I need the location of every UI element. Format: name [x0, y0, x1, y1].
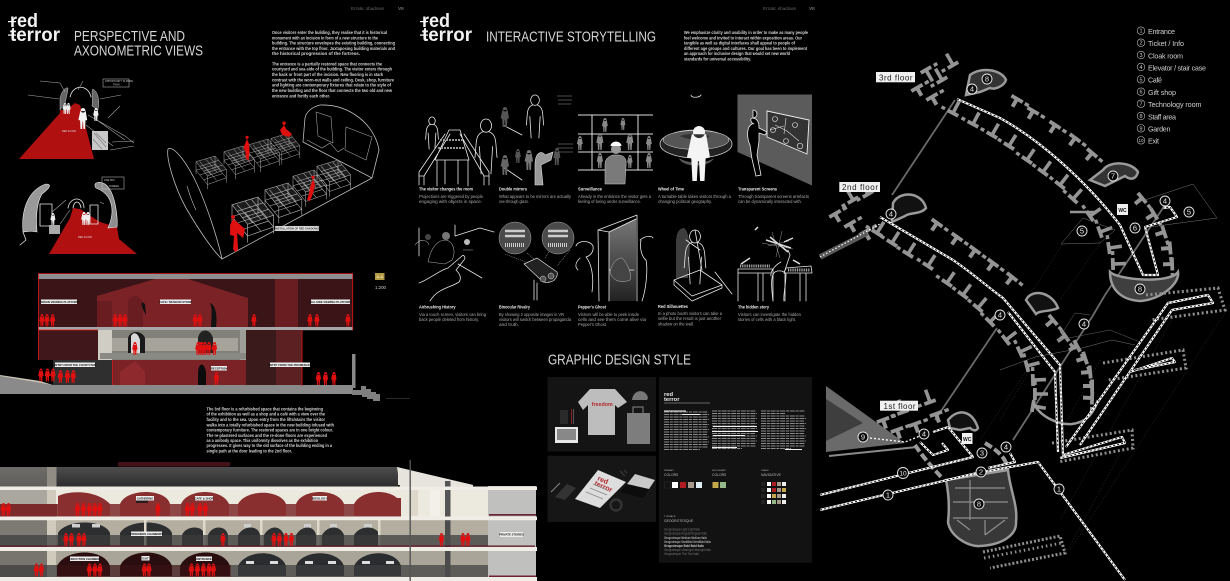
- sketch: perspective of entrance with red floor: RED FLOOR: [62, 130, 76, 133]
- panel: brand guideline sheet: [659, 377, 812, 563]
- legend: numbered room list: 5: [1139, 77, 1143, 83]
- WC signs: [962, 204, 1128, 444]
- map markers: numbered circles: 4: [1004, 443, 1008, 452]
- map markers: numbered circles: 10: [899, 470, 907, 478]
- caption: the visitor changes the room: Projections are triggered by people: [419, 194, 484, 199]
- text block: inclusive design statement: an approach for inclusive design that would set new world: [684, 51, 790, 56]
- text block: entrance description: and lighting are contemporary fixtures that relate to the style of: [272, 83, 391, 88]
- text block: 3rd floor description: of the exhibition as well as a shop and a café with a view over the: [206, 412, 325, 416]
- sketch: perspective of hall with red floor: [20, 177, 137, 254]
- labels: long section room labels: ENTRANCE: [196, 557, 212, 561]
- dotted garden path and entry road: [820, 224, 920, 442]
- floor slabs: white bands: [0, 486, 537, 581]
- highlighted text streaks: [664, 410, 802, 450]
- caption: the visitor changes the room: [419, 186, 484, 204]
- caption: wheel of time: [658, 186, 732, 204]
- labels: section room labels: ENTRY FROM THE PROMENADE: [268, 363, 312, 367]
- heading: perspective and axonometric views: AXONOMETRIC VIEWS: [74, 44, 203, 60]
- map markers: numbered circles: 9: [861, 433, 865, 442]
- figures: visitors in section: [38, 314, 350, 385]
- caption: red silhouettes: Red Silhouettes: [658, 304, 688, 309]
- palette: navigative: USAGE: [761, 469, 769, 472]
- sketch: perspective of hall with red floor: RED FLOOR: [78, 236, 92, 239]
- palette: primary colors: COLORS: [664, 473, 679, 477]
- text block: 3rd floor description: progresses. It gives way to the old surface of the building ending in a: [206, 443, 332, 448]
- legend: numbered room list: Garden: [1148, 125, 1170, 134]
- text block: inclusive design statement: feel welcome and invited to interact within exposition areas. Our: [684, 35, 802, 40]
- WC signs: WC: [963, 437, 972, 443]
- scale badge: A-A and 1:200: A-A: [376, 275, 383, 279]
- panel: perspective and axonometric views: [0, 6, 410, 454]
- plan: garden triangle: [826, 386, 917, 457]
- text block: 3rd floor description: The re-plastered surfaces and the re-done floors are experienced: [206, 433, 327, 438]
- vignette: transparent screens: [738, 94, 812, 204]
- palette: secondary colors: SECONDARY: [712, 469, 726, 472]
- typography specimen: Geogrotesque UltraLight UltraLight Italic: [664, 548, 711, 552]
- caption: binocular rivalry: By showing 2 opposite images in VR: [499, 312, 564, 317]
- scale badge: A-A and 1:200: 1:200: [375, 285, 387, 290]
- legend: numbered room list: Exit: [1148, 137, 1159, 146]
- map markers: numbered circles: 7: [1111, 172, 1115, 181]
- plan: third floor wing: [910, 51, 1217, 301]
- caption: double mirrors: What appears to be mirrors are actually: [499, 194, 572, 199]
- caption: Pepper's ghost: Pepper's Ghost: [578, 304, 606, 310]
- caption: transparent screens: [738, 186, 810, 204]
- caption: the hidden story: Visitors can investigate the hidden: [738, 312, 802, 317]
- elevator shafts and thin projection lines: [892, 100, 1230, 555]
- labels: long section room labels: PRISONERS CHAMBERS: [130, 532, 163, 536]
- map markers: numbered circles: 8: [985, 75, 989, 84]
- text block: inclusive design statement: [684, 30, 808, 61]
- labels: long section room labels: CAFE & SHOP: [194, 496, 214, 500]
- typography specimen: GEOGROTESQUE: [664, 519, 694, 523]
- header: page running title: [763, 6, 815, 12]
- text block: entrance description: the back or front part of the incision. New flooring is in stark: [272, 72, 383, 77]
- typography specimen: Geogrotesque Thin Thin Italic: [664, 552, 699, 556]
- panel: axonometric floor plan wayfinding map: [820, 27, 1230, 580]
- caption: red silhouettes: [658, 304, 723, 326]
- legend: numbered room list: Staff area: [1148, 112, 1176, 121]
- caption: Pepper's ghost: [578, 304, 647, 327]
- logo: red terror: [8, 11, 61, 46]
- legend: numbered room list: [1137, 27, 1206, 146]
- legend: numbered room list: 7: [1139, 102, 1143, 108]
- vignette: the hidden story: [738, 227, 812, 322]
- map markers: numbered circles: [858, 74, 1194, 509]
- caption: Pepper's ghost: cells and see them come alive via: [578, 317, 647, 322]
- map markers: numbered circles: 6: [1133, 224, 1137, 233]
- map markers: numbered circles: 4: [998, 311, 1002, 320]
- text block: entrance description: The entrance is a partially restored space that connects the: [272, 61, 382, 66]
- sketch: perspective of hall with red floor: SCREEN: [109, 185, 119, 188]
- caption: the hidden story: The hidden story: [738, 304, 769, 310]
- sketch: perspective of entrance with red floor: [19, 79, 134, 159]
- legend: numbered room list: Technology room: [1148, 100, 1202, 109]
- scale badge: A-A and 1:200: [375, 273, 387, 290]
- text block: 3rd floor description: walks into a totally refurbished space in the new building infused with: [206, 422, 334, 427]
- section drawing: long elevation with arches: [0, 460, 537, 581]
- legend: numbered room list: Entrance: [1148, 27, 1175, 36]
- legend: numbered room list: 9: [1139, 126, 1143, 132]
- caption: the hidden story: stories of cells with a black light.: [738, 317, 796, 322]
- text block: 3rd floor description: facility and to the sea. Upon entry from the lifts/stairs the visitor: [206, 417, 325, 422]
- legend: numbered room list: Gift shop: [1148, 88, 1176, 97]
- legend: numbered room list: Elevator / stair case: [1148, 64, 1206, 72]
- vignette: Pepper's ghost: [576, 215, 653, 327]
- heading: graphic design style: GRAPHIC DESIGN STYLE: [548, 352, 691, 368]
- plan: first floor wing: [876, 288, 1225, 568]
- labels: section room labels: SEA-SIDE VIEWING PLATFORM: [309, 300, 352, 304]
- logo: red terror: red: [422, 11, 450, 32]
- text columns: body copy: [664, 411, 806, 450]
- logo: red terror: terror: [422, 25, 473, 46]
- logo: red terror small: [664, 392, 710, 404]
- text block: 3rd floor description: [206, 406, 334, 454]
- map markers: numbered circles: 5: [1187, 208, 1191, 217]
- section drawing A-A: building section with red spaces: [0, 274, 410, 401]
- caption: binocular rivalry: Binocular Rivalry: [499, 304, 530, 310]
- caption: binocular rivalry: [499, 304, 572, 327]
- caption: the visitor changes the room: engaging with objects in space.: [419, 199, 482, 204]
- mockup: stationery: [548, 456, 656, 522]
- labels: long section room labels: GATHERING: [137, 496, 153, 500]
- header: page running title: VII: [398, 6, 404, 11]
- caption: transparent screens: can be dynamically interacted with.: [738, 199, 802, 204]
- legend: numbered room list: 3: [1139, 53, 1143, 59]
- vignette: double mirrors: [499, 95, 573, 204]
- text block: entrance description: the historical progression of the fortress.: [272, 51, 360, 56]
- caption: red silhouettes: shadow on the wall.: [658, 321, 694, 326]
- palette: navigative: [761, 469, 786, 504]
- caption: Pepper's ghost: Visitors will be able to peek inside: [578, 312, 640, 317]
- labels: section room labels: PRISON VIEWING PLATFORM: [39, 300, 80, 304]
- labels: long section room labels: PRIVATE STORIES: [499, 532, 524, 536]
- caption: transparent screens: Transparent Screens: [738, 186, 777, 192]
- floor: first floor with dark red arches: [0, 551, 536, 577]
- legend: numbered room list: Cloak room: [1148, 51, 1183, 60]
- map markers: numbered circles: 5: [1080, 227, 1084, 236]
- heading: interactive storytelling: INTERACTIVE STORYTELLING: [486, 30, 656, 46]
- typography specimen: Geogrotesque Light Light Italic: [664, 528, 700, 532]
- labels: section room labels: ENTRY FROM THE COURTYARD: [53, 363, 97, 367]
- legend: numbered room list: 2: [1139, 41, 1143, 47]
- legend: numbered room list: 10: [1138, 138, 1144, 143]
- text block: inclusive design statement: tangible as well as digital interfaces shall appeal to people of: [684, 41, 795, 46]
- caption: red silhouettes: selfie but the result is just another: [658, 316, 722, 321]
- text block: 3rd floor description: The 3rd floor is a refurbished space that contains the beginning: [206, 406, 323, 411]
- palette: navigative: NAVIGATIVE: [761, 473, 782, 477]
- caption: Pepper's ghost: Pepper's Ghost.: [578, 322, 607, 327]
- text block: entrance description: contrast with the worn-out walls and ceiling. Desk, shop, furniture: [272, 78, 394, 82]
- labels: section room labels: CAFE / MUSEUM STORE: [159, 300, 192, 304]
- typography specimen: Geogrotesque Regular Regular Italic: [664, 532, 707, 536]
- map markers: numbered circles: 4: [1163, 197, 1167, 206]
- caption: double mirrors: see-through glass.: [499, 199, 529, 204]
- caption: wheel of time: Wheel of Time: [658, 186, 684, 192]
- labels: long section room labels: [69, 496, 524, 561]
- text block: entrance description: Once visitors enter the building, they realise that it is historical: [272, 30, 387, 35]
- logo: red terror: red: [10, 11, 38, 32]
- text block: entrance description: monument with an incision in form of a new structure to the: [272, 35, 378, 40]
- map markers: numbered circles: 4: [889, 210, 893, 219]
- caption: surveillance: Already in the entrance the visitor gets a: [578, 194, 652, 199]
- palette: primary colors: [664, 469, 702, 488]
- vignette: wheel of time: [658, 95, 732, 204]
- text block: entrance description: courtyard and sea-side of the building. The visitor enters through: [272, 67, 392, 72]
- floor labels: 1st floor: [884, 402, 916, 411]
- labels: long section room labels: IDEOLOGY: [312, 496, 327, 500]
- map markers: numbered circles: 1: [1057, 485, 1061, 494]
- text block: inclusive design statement: different age groups and cultures. Our goal has been to implement: [684, 46, 807, 51]
- palette: secondary colors: COLORS: [712, 473, 727, 477]
- mockup: merchandise: [548, 377, 656, 452]
- floor labels: 2nd floor: [842, 183, 878, 192]
- caption: airbrushing history: Airbrushing History: [419, 304, 456, 310]
- map markers: numbered circles: 1: [886, 491, 890, 500]
- caption: the hidden story: [738, 304, 802, 322]
- caption: the visitor changes the room: The visitor changes the room: [419, 186, 473, 192]
- map markers: numbered circles: 8: [1138, 285, 1142, 294]
- caption: airbrushing history: [419, 304, 487, 322]
- caption: surveillance: [578, 186, 652, 204]
- map markers: numbered circles: 4: [970, 85, 974, 94]
- typography specimen: TYPEFACE: [664, 515, 676, 518]
- caption: surveillance: Surveillance: [578, 186, 602, 192]
- heading: perspective and axonometric views: PERSPECTIVE AND: [74, 29, 185, 45]
- map markers: numbered circles: 4: [1082, 320, 1086, 329]
- sketch: perspective of entrance with red floor: THAN: [113, 84, 120, 86]
- panel: interactive storytelling: [415, 6, 815, 563]
- legend: numbered room list: 8: [1139, 114, 1143, 120]
- caption: surveillance: feeling of being under surveillance.: [578, 199, 641, 204]
- wayfinding routes: [820, 99, 1213, 580]
- axonometric drawing: installation of red shadows: [168, 105, 379, 259]
- logo: red terror: terror: [10, 25, 61, 46]
- mockup: merchandise: freedom: [592, 402, 613, 408]
- legend: numbered room list: Café: [1148, 76, 1162, 85]
- mockup: stationery: terror: [593, 480, 613, 494]
- WC signs: WC: [1118, 208, 1127, 214]
- caption: double mirrors: [499, 186, 572, 204]
- text block: 3rd floor description: contemporary furniture. The restored spaces are in one bright colour.: [206, 427, 333, 432]
- text block: 3rd floor description: single path at the door leading to the 2nd floor.: [206, 448, 292, 454]
- typography specimen: Geogrotesque SemiBold SemiBold Italic: [664, 540, 711, 544]
- logo: red terror small: red: [664, 392, 673, 398]
- legend: numbered room list: 1: [1139, 29, 1143, 35]
- vignette: airbrushing history: [415, 225, 494, 322]
- floor: second floor with dark arches: [0, 520, 536, 547]
- typography specimen: Geogrotesque Bold Bold Italic: [664, 544, 704, 548]
- caption: wheel of time: changing political geography.: [658, 199, 712, 204]
- typography specimen: [664, 515, 711, 556]
- plan: second floor wing: [828, 180, 1140, 424]
- palette: secondary colors: [712, 469, 727, 488]
- caption: red silhouettes: In a photo booth visitors can take a: [658, 311, 723, 316]
- labels: section room labels: RECEPTION: [211, 366, 227, 370]
- logo: red terror small: terror: [664, 397, 680, 403]
- map markers: numbered circles: 3: [980, 449, 984, 458]
- legend: numbered room list: 4: [1139, 65, 1143, 71]
- header: page running title: Erratic shadows: [763, 6, 797, 12]
- axonometric drawing: installation of red shadows: INSTALLATION OF RED SHADOWS: [275, 226, 319, 230]
- sketch: perspective of hall with red floor: ONE WAY: [104, 179, 115, 182]
- legend: numbered room list: Ticket / Info: [1148, 39, 1184, 48]
- header: page running title: Erratic shadows: [351, 6, 385, 12]
- text block: inclusive design statement: standards for universal accessibility.: [684, 56, 751, 61]
- labels: section room labels: [39, 300, 352, 370]
- sketch: perspective of entrance with red floor: OPPORTUNITY IS MORE: [105, 80, 133, 83]
- mockup: stationery: red: [596, 475, 609, 486]
- caption: airbrushing history: back people deleted from history.: [419, 317, 479, 322]
- vignette: binocular rivalry: [499, 222, 574, 327]
- floor labels: [839, 72, 918, 411]
- heading: perspective and axonometric views: [74, 29, 203, 60]
- palette: primary colors: PRIMARY: [664, 469, 674, 472]
- text block: entrance description: [272, 30, 395, 98]
- caption: double mirrors: Double mirrors: [499, 186, 527, 192]
- caption: wheel of time: A turnable table takes visitors through a: [658, 194, 732, 199]
- vignette: surveillance: [577, 115, 653, 204]
- header: page running title: VII: [809, 6, 815, 11]
- map markers: numbered circles: 8: [977, 500, 981, 509]
- text block: entrance description: building. The structure envelopes the existing building, connecting: [272, 41, 395, 46]
- caption: binocular rivalry: and truth.: [499, 322, 519, 327]
- labels: long section room labels: EXIT: [142, 556, 149, 560]
- figures: visitors in long section: [1, 503, 471, 576]
- typography specimen: Geogrotesque Medium Medium Italic: [664, 536, 707, 540]
- floor: third floor with red arches: [0, 481, 536, 517]
- logo: red terror: [420, 11, 473, 46]
- map markers: numbered circles: 4: [922, 430, 926, 439]
- text block: 3rd floor description: as a unibody space. This uniformity dissolves as the exhibition: [206, 438, 318, 443]
- legend: numbered room list: 6: [1139, 90, 1143, 96]
- vignette: the visitor changes the room: [419, 117, 497, 204]
- text block: entrance description: the new building and the floor that connects the two old and new: [272, 88, 392, 93]
- caption: binocular rivalry: visitors will switch between propaganda: [499, 317, 572, 322]
- map markers: numbered circles: 2: [979, 468, 983, 477]
- floor labels: 3rd floor: [879, 73, 913, 82]
- caption: airbrushing history: Via a touch screen, visitors can bring: [419, 312, 487, 317]
- header: page running title: [351, 6, 404, 12]
- caption: transparent screens: Through transparent screens artefacts: [738, 194, 810, 199]
- text block: entrance description: entrance and fortify each other.: [272, 93, 330, 98]
- text block: inclusive design statement: We emphasize clarity and usability in order to make as many people: [684, 30, 808, 35]
- text block: entrance description: the entrance with the top floor. Juxtaposing building materials and: [272, 46, 395, 51]
- labels: long section room labels: EXECUTION CHAMBER: [69, 557, 100, 561]
- vignette: red silhouettes: [658, 228, 732, 326]
